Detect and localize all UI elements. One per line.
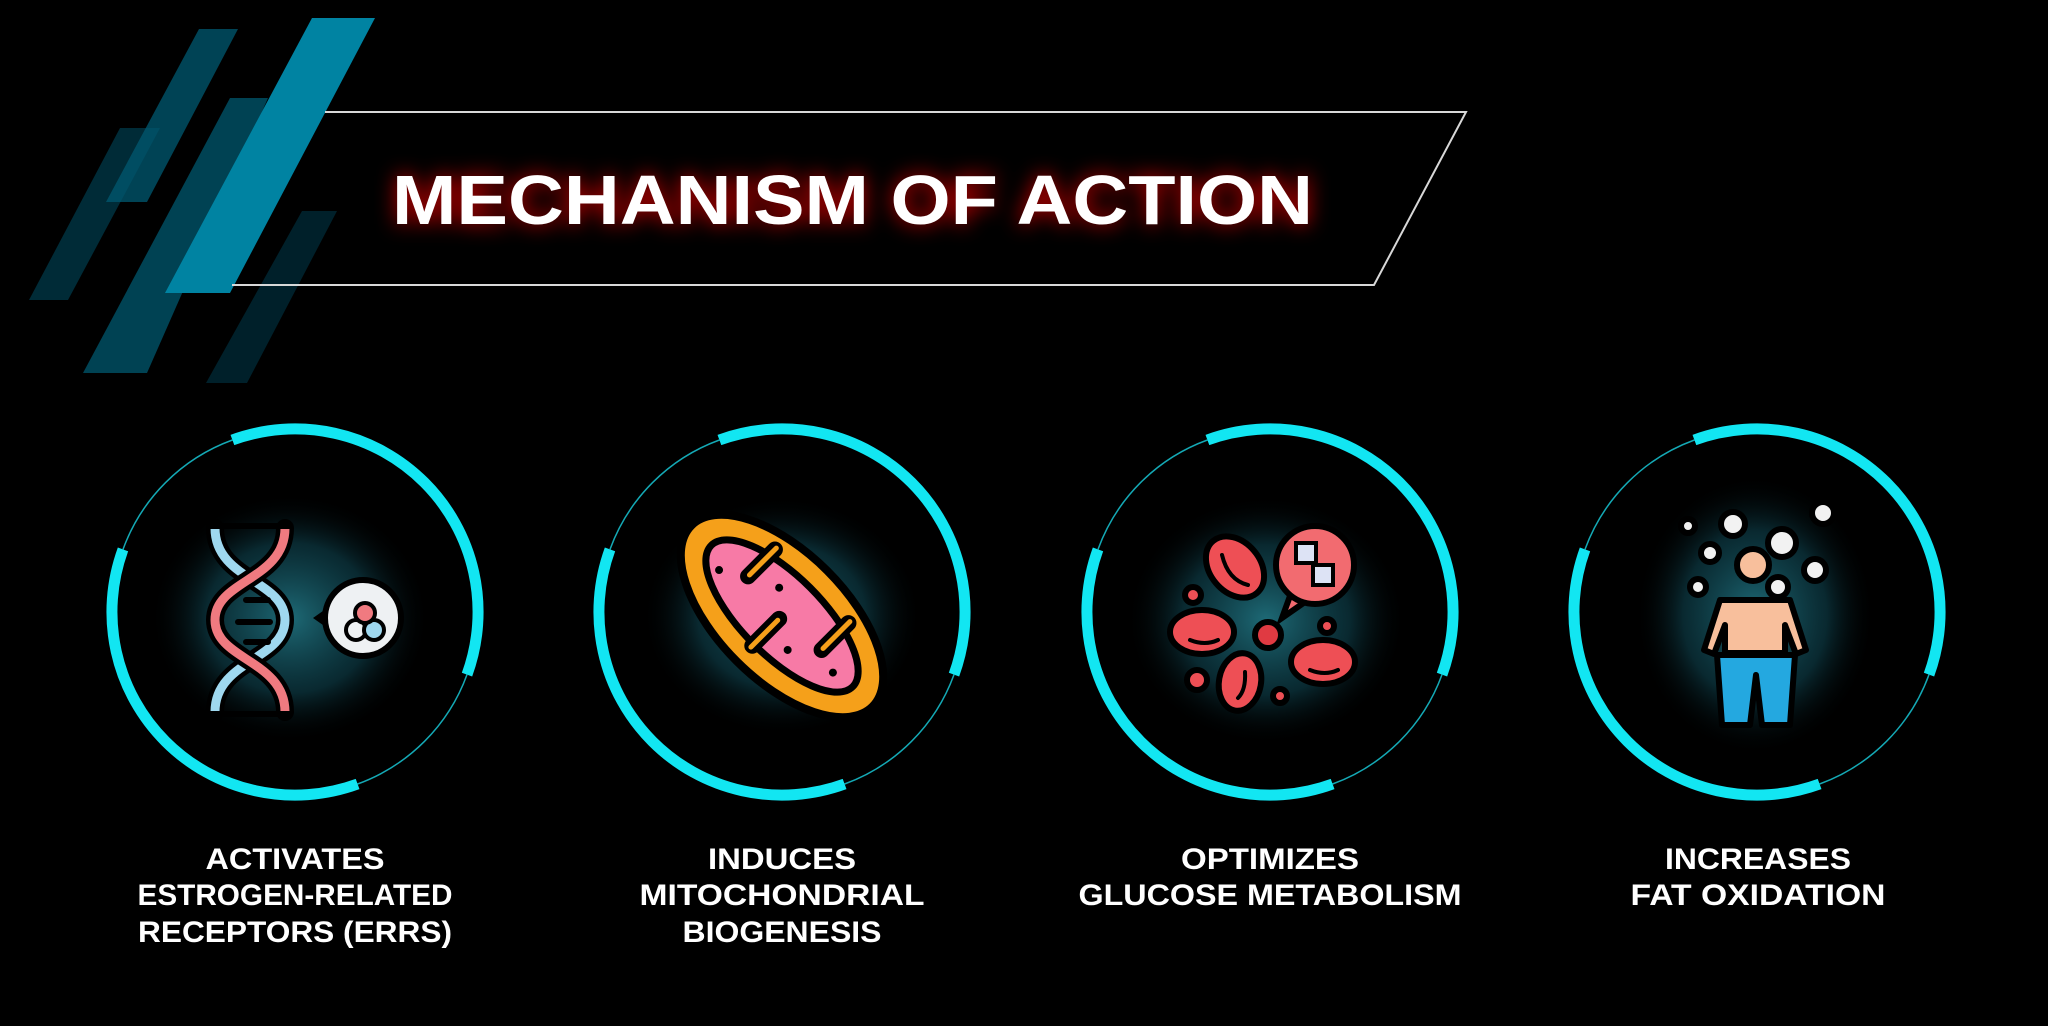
label 2 bbox=[640, 843, 924, 949]
ring 4 bbox=[1574, 429, 1940, 795]
title: MECHANISM OF ACTION bbox=[392, 161, 1313, 239]
title: MECHANISM OF ACTION bbox=[392, 161, 1313, 239]
icon: person with fat bubbles bbox=[1635, 475, 1875, 755]
label 4 bbox=[1630, 843, 1886, 912]
ring 3 bbox=[1087, 429, 1453, 795]
title frame bbox=[232, 112, 1466, 285]
label 1: ESTROGEN-RELATED bbox=[138, 879, 452, 912]
icon: DNA with molecule bubble bbox=[150, 493, 430, 743]
label 3: OPTIMIZES bbox=[1181, 843, 1359, 876]
panel: fat oxidation bbox=[1574, 429, 1940, 912]
label 4: FAT OXIDATION bbox=[1630, 879, 1886, 912]
icon: mitochondrion bbox=[642, 480, 922, 752]
label 1: ACTIVATES bbox=[206, 843, 384, 876]
label 3 bbox=[1078, 843, 1462, 912]
label 2: BIOGENESIS bbox=[682, 916, 882, 949]
ring 2 bbox=[599, 429, 965, 795]
label 2: MITOCHONDRIAL bbox=[640, 879, 924, 912]
decoration: slanted bars bbox=[29, 18, 375, 383]
label 2: INDUCES bbox=[708, 843, 856, 876]
label 1: RECEPTORS (ERRS) bbox=[138, 916, 452, 949]
panel: ERRs bbox=[112, 429, 478, 949]
ring 1 bbox=[112, 429, 478, 795]
label 3: GLUCOSE METABOLISM bbox=[1078, 879, 1462, 912]
label 1 bbox=[138, 843, 452, 949]
panel: mitochondria bbox=[599, 429, 965, 949]
label 4: INCREASES bbox=[1665, 843, 1851, 876]
panel: glucose bbox=[1078, 429, 1462, 912]
icon: blood cells with sugar bbox=[1126, 495, 1406, 745]
